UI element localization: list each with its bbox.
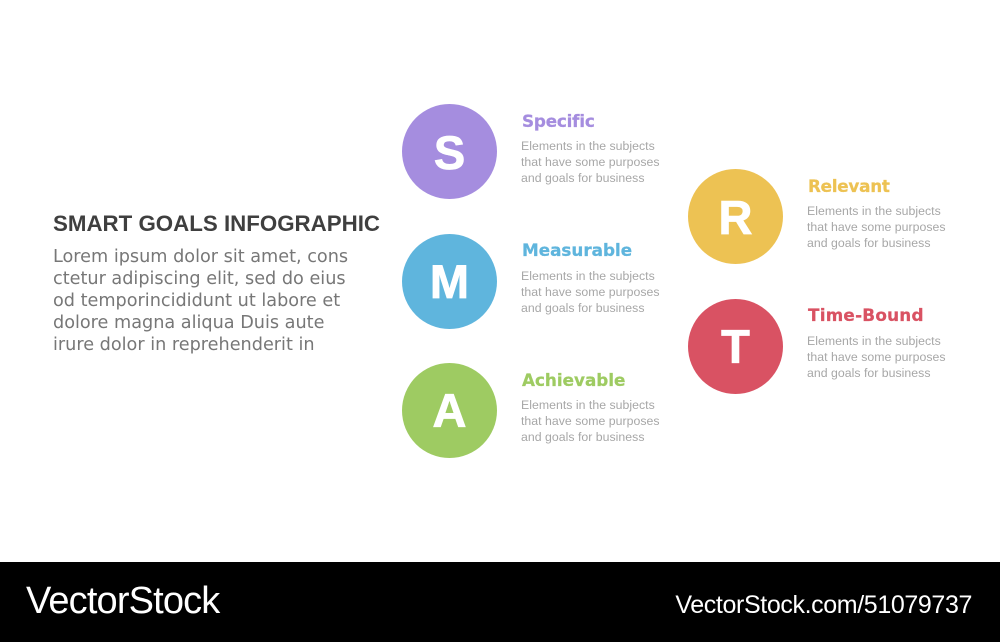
intro text block: Lorem ipsum dolor sit amet, cons <box>53 246 348 266</box>
footer bar <box>0 562 1000 642</box>
heading: Relevant: Relevant <box>808 176 890 196</box>
heading: Achievable: Achievable <box>522 370 625 390</box>
description: Achievable: that have some purposes <box>521 414 660 428</box>
icon: R circle: R <box>719 191 752 244</box>
description: Relevant <box>807 204 946 250</box>
description: Specific: and goals for business <box>521 171 644 185</box>
icon: T circle: T <box>721 320 750 373</box>
description: Measurable <box>521 269 660 315</box>
icon: A circle <box>402 363 497 458</box>
title: SMART GOALS INFOGRAPHIC <box>53 211 380 236</box>
description: Measurable: that have some purposes <box>521 285 660 299</box>
description: Achievable <box>521 398 660 444</box>
description: Time-Bound: that have some purposes <box>807 350 946 364</box>
intro text block: dolore magna aliqua Duis aute <box>53 312 324 332</box>
description: Specific: that have some purposes <box>521 155 660 169</box>
heading: Time-Bound: Time-Bound <box>808 305 924 325</box>
item: Specific <box>402 104 660 199</box>
description: Relevant: that have some purposes <box>807 220 946 234</box>
icon: S circle: S <box>434 126 465 179</box>
description: Specific: Elements in the subjects <box>521 139 655 153</box>
heading: Measurable: Measurable <box>522 240 632 260</box>
description: Relevant: Elements in the subjects <box>807 204 941 218</box>
description: Measurable: and goals for business <box>521 301 644 315</box>
description: Specific <box>521 139 660 185</box>
icon: M circle: M <box>430 255 469 308</box>
description: Time-Bound: Elements in the subjects <box>807 334 941 348</box>
icon: R circle <box>688 169 783 264</box>
intro text block: ctetur adipiscing elit, sed do eius <box>53 268 346 288</box>
item: Achievable <box>402 363 660 458</box>
intro text block <box>53 246 348 354</box>
item: Relevant <box>688 169 946 264</box>
description: Time-Bound: and goals for business <box>807 366 930 380</box>
icon: T circle <box>688 299 783 394</box>
icon: M circle <box>402 234 497 329</box>
description: Achievable: and goals for business <box>521 430 644 444</box>
description: Relevant: and goals for business <box>807 236 930 250</box>
heading: Specific: Specific <box>522 110 595 130</box>
footer logo: VectorStock <box>26 580 219 622</box>
icon: S circle <box>402 104 497 199</box>
intro text block: od temporincididunt ut labore et <box>53 290 340 310</box>
item: Measurable <box>402 234 660 329</box>
icon: A circle: A <box>433 384 466 437</box>
intro text block: irure dolor in reprehenderit in <box>53 334 315 354</box>
description: Time-Bound <box>807 334 946 380</box>
footer url: VectorStock.com/51079737 <box>675 591 972 619</box>
description: Achievable: Elements in the subjects <box>521 398 655 412</box>
description: Measurable: Elements in the subjects <box>521 269 655 283</box>
item: Time-Bound <box>688 299 946 394</box>
